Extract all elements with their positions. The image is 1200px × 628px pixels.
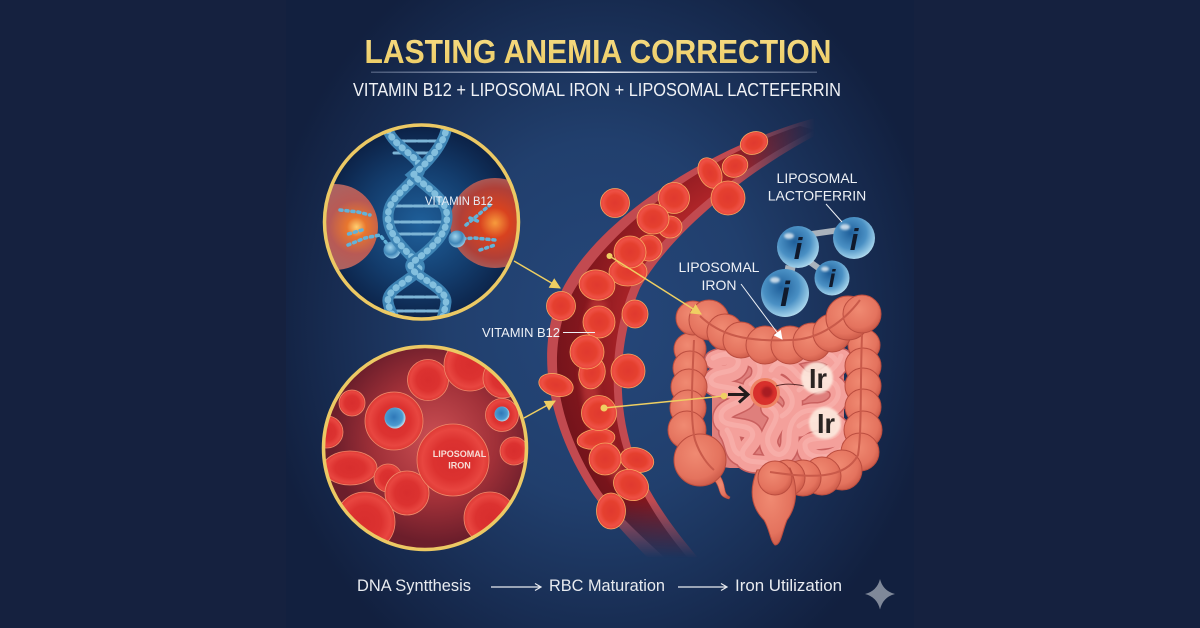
colon band — [692, 300, 862, 476]
DNA helix — [388, 125, 447, 330]
icon: sparkle — [865, 579, 895, 610]
bottom flow — [357, 577, 842, 595]
label: liposomal lactoferrin — [768, 170, 866, 222]
title: LASTING ANEMIA CORRECTION — [364, 33, 832, 70]
iron marker bottom: Ir — [817, 408, 835, 439]
iron particle large — [384, 408, 406, 428]
label: liposomal lactoferrin: LACTOFERRIN — [768, 188, 866, 204]
circle: red cells with liposomal iron — [311, 339, 528, 552]
circle ring — [324, 125, 518, 319]
subtitle: VITAMIN B12 + LIPOSOMAL IRON + LIPOSOMAL LACTEFERRIN — [353, 79, 841, 100]
flow step: iron utilization: Iron Utilization — [735, 577, 842, 595]
sphere 1: i — [794, 231, 804, 266]
sphere 2: i — [850, 222, 860, 257]
label liposomal iron in circle: LIPOSOMAL — [433, 449, 487, 459]
flow step: RBC maturation: RBC Maturation — [549, 577, 665, 595]
liposomal lactoferrin spheres — [761, 217, 875, 317]
label line: vitamin B12: VITAMIN B12 — [482, 325, 560, 340]
arrow: black absorption — [728, 386, 748, 402]
circle: DNA and vitamin B12 — [322, 123, 520, 321]
large labelled cell — [417, 424, 489, 496]
small intestine loops — [711, 351, 842, 466]
molecule chains — [340, 205, 495, 250]
sphere 4: i — [829, 265, 837, 293]
small intestine base — [712, 352, 844, 468]
flow arrow 1 — [491, 584, 541, 590]
iron marker top: Ir — [809, 363, 827, 394]
label: liposomal iron: LIPOSOMAL — [679, 259, 760, 275]
label liposomal iron in circle: IRON — [448, 460, 471, 470]
arrow: DNA circle to vessel — [514, 261, 560, 288]
blood vessel — [547, 118, 830, 560]
label: liposomal iron: IRON — [702, 277, 736, 293]
iron marker top — [801, 362, 833, 394]
red blood cells in vessel — [536, 128, 771, 529]
iron marker bottom — [809, 407, 841, 439]
label: liposomal lactoferrin: LIPOSOMAL — [777, 170, 858, 186]
arrow: iron circle to vessel — [524, 401, 555, 418]
vitamin balls — [384, 242, 400, 258]
title divider — [371, 72, 817, 73]
arrow: vessel to small intestine — [600, 393, 727, 412]
lesion — [750, 378, 804, 408]
circle ring — [324, 346, 526, 550]
center panel background — [286, 0, 914, 628]
iron particle small — [494, 406, 510, 422]
left cell — [326, 184, 378, 270]
sphere 3: i — [780, 275, 791, 314]
label vitamin B12 in circle: VITAMIN B12 — [425, 194, 493, 208]
large intestine and small intestine — [668, 295, 882, 545]
molecule connectors — [785, 230, 840, 272]
label line: vitamin B12 — [482, 325, 595, 340]
arrow: vessel to colon — [606, 253, 701, 314]
label: liposomal iron — [679, 259, 782, 339]
colon — [668, 295, 882, 545]
flow step: DNA synthesis: DNA Syntthesis — [357, 577, 471, 595]
flow arrow 2 — [678, 584, 727, 590]
right cell — [450, 178, 517, 268]
